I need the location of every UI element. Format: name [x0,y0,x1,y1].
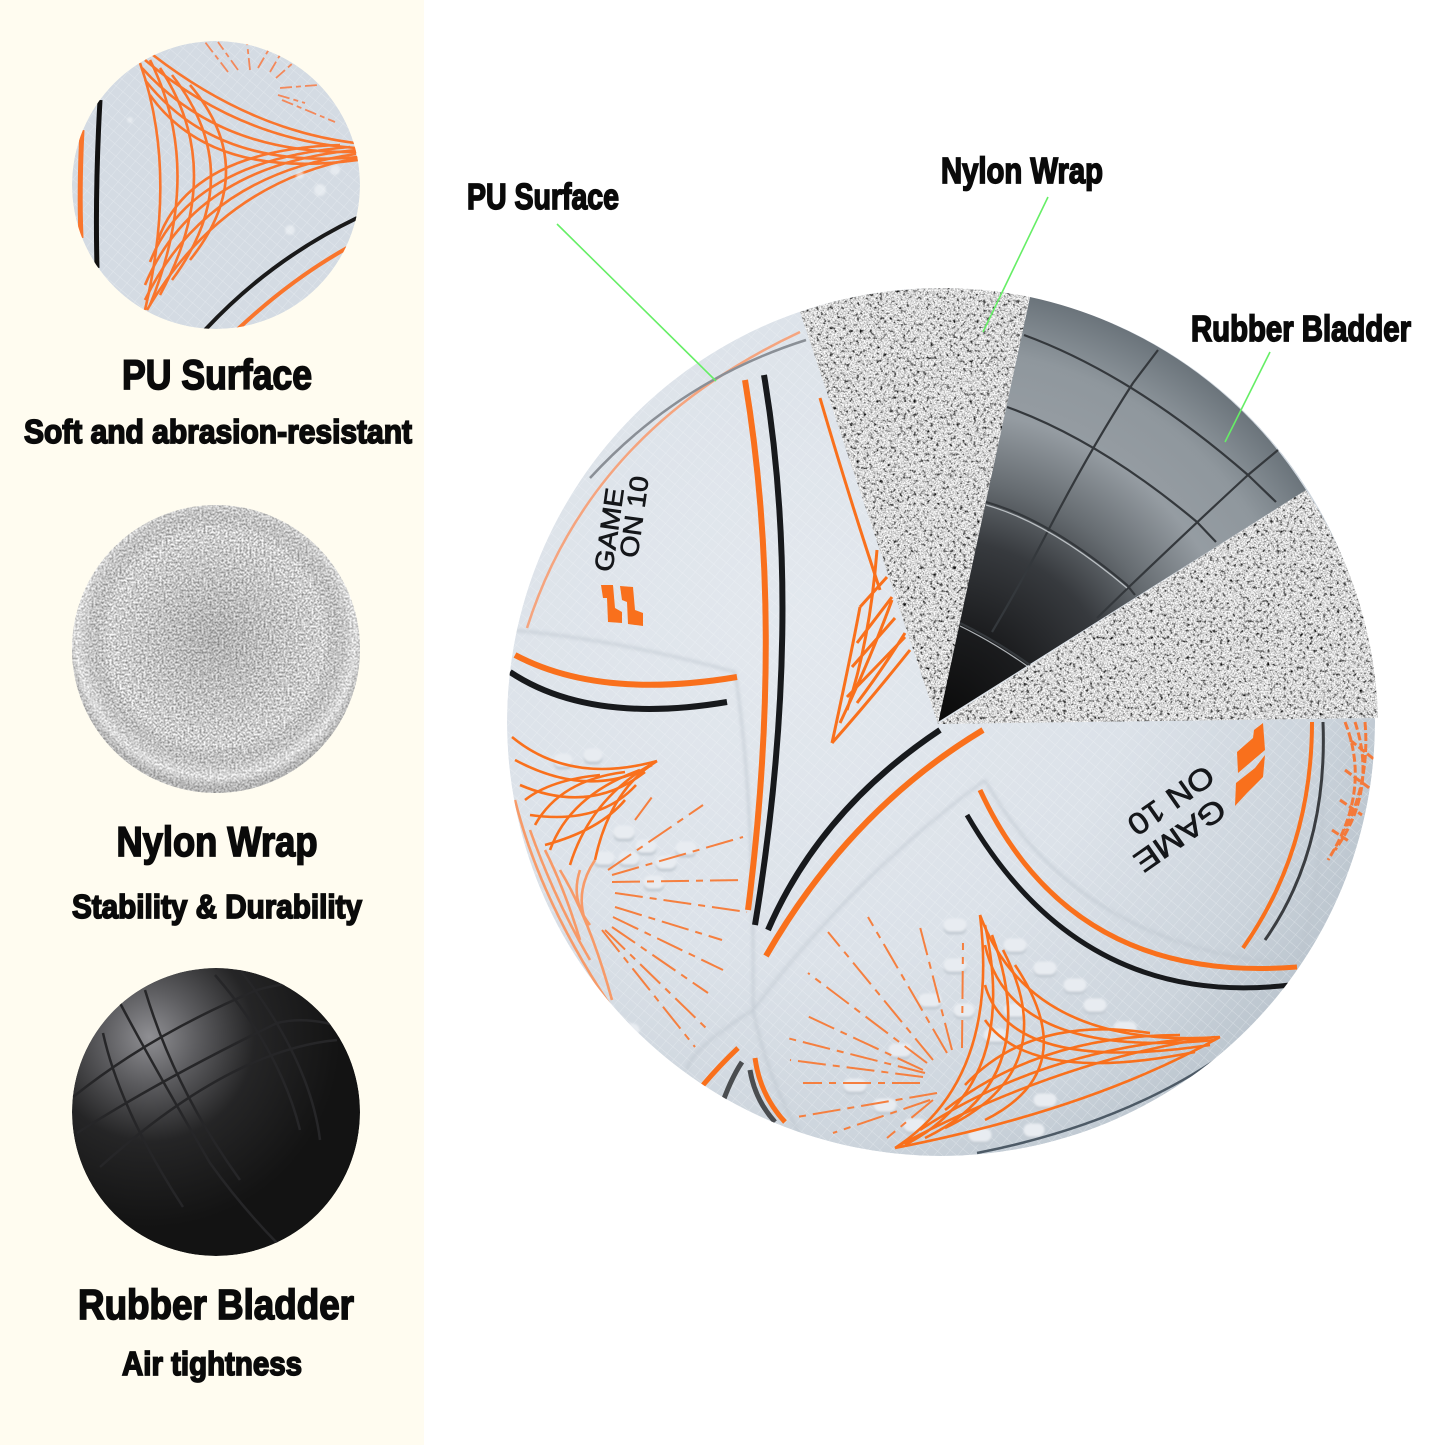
net: upper panel [832,550,910,743]
net: left panel [512,737,657,865]
layer: nylon top wedge [800,288,1030,724]
text: nylon wrap description: Stability & Durability [72,888,363,925]
logo: inverted game on 10: ON 10 [1121,758,1220,841]
ball surface [507,288,1375,1156]
rays: lower sunburst [787,917,963,1138]
layer: rubber bladder wedge [938,297,1306,722]
heading: PU Surface: PU Surface [122,351,312,398]
callout: Rubber Bladder [1191,308,1411,442]
callout: PU Surface [467,176,716,381]
panel: rubber bladder swatch [72,968,360,1256]
panel: left sidebar background [0,0,424,1445]
logo: inverted game on 10 [1121,723,1265,878]
logo: upper game on 10: GAME [588,486,630,573]
logo: inverted game on 10: GAME [1127,791,1232,878]
text: PU surface description: Soft and abrasion-resistant [24,413,412,450]
net: lower panel [895,915,1220,1148]
panel: PU surface swatch [72,41,360,330]
text: rubber bladder description: Air tightness [122,1345,302,1382]
layer: nylon right wedge [938,490,1378,724]
embossed bumps [548,755,1130,1138]
callout: Nylon Wrap: Nylon Wrap [941,150,1103,191]
callout: Nylon Wrap [941,150,1103,332]
heading: Rubber Bladder: Rubber Bladder [78,1281,354,1328]
rays: left sunburst [602,797,747,1047]
panel: nylon wrap swatch [72,505,360,793]
chart: ball cutaway [507,288,1378,1156]
logo: upper game on 10: ON 10 [614,474,655,559]
heading: Nylon Wrap: Nylon Wrap [116,818,318,865]
callout: PU Surface: PU Surface [467,176,619,217]
net: right edge [1328,722,1375,860]
logo: upper game on 10 [588,474,655,626]
